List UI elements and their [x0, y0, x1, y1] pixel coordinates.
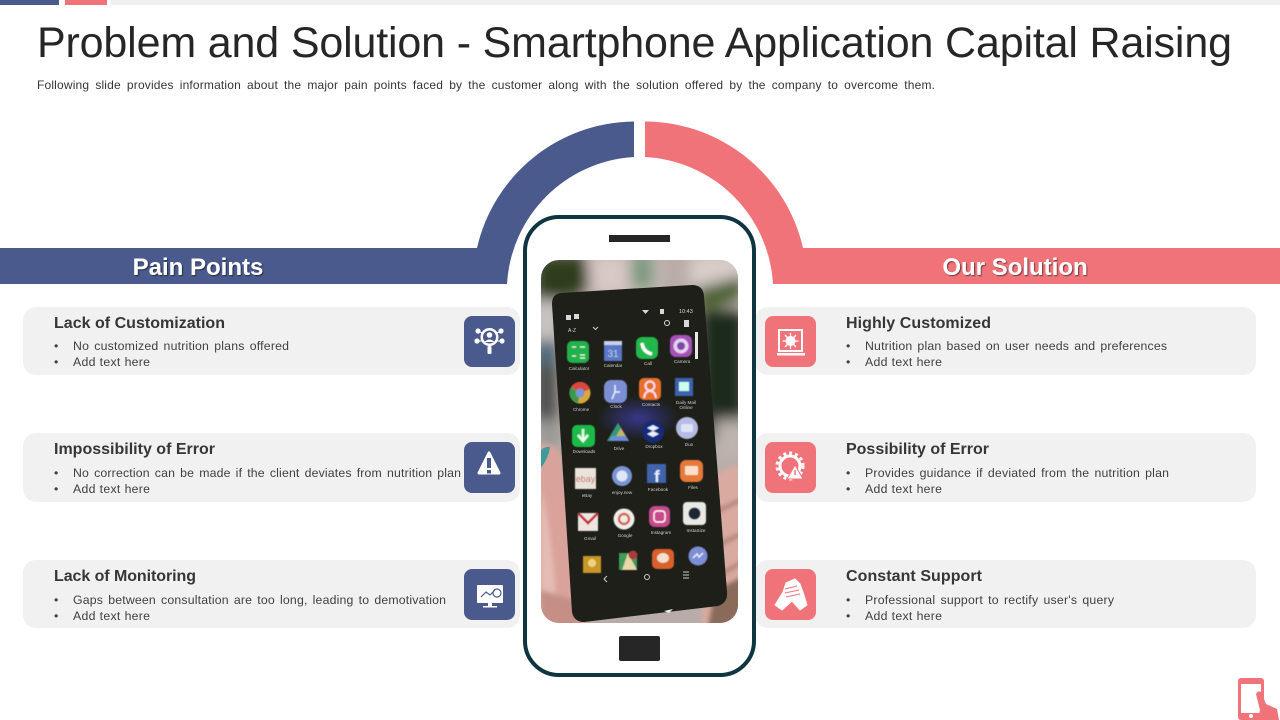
panel: lack of customization [23, 307, 520, 375]
panel: impossibility of error [23, 433, 520, 502]
app labels: Drive [614, 446, 625, 451]
app icons: f [654, 467, 660, 486]
bullet list [54, 593, 446, 623]
bullet list: • [54, 609, 58, 623]
app labels [569, 359, 706, 541]
app labels: Facebook [648, 487, 669, 492]
heading: Highly Customized [846, 315, 991, 332]
app labels: Calculator [569, 366, 590, 371]
bullet list: Add text here [865, 482, 942, 496]
app icons [567, 335, 708, 573]
bullet list: • [54, 466, 58, 480]
status bar and nav bar [566, 309, 698, 613]
phone home button [619, 636, 660, 661]
bullet list: • [846, 355, 850, 369]
fingernail [541, 447, 550, 468]
app labels: eBay [582, 493, 593, 498]
phone photo [541, 260, 738, 623]
app labels: enjoy.new [612, 490, 633, 495]
bullet list: • [54, 482, 58, 496]
icon: monitoring [464, 569, 515, 620]
heading: Lack of Customization [54, 315, 225, 332]
bullet list [846, 593, 1115, 623]
bullet list: • [846, 339, 850, 353]
icon: warning [464, 442, 515, 493]
heading: pain points: Pain Points [133, 254, 263, 281]
bullet list: Add text here [865, 355, 942, 369]
app labels: Clock [610, 404, 622, 409]
bullet list: Nutrition plan based on user needs and preferences [865, 339, 1167, 353]
bullet list: No customized nutrition plans offered [73, 339, 289, 353]
smartphone body [552, 285, 727, 622]
bullet list: Add text here [865, 609, 942, 623]
app icons: ebay [576, 474, 596, 484]
icon: customization [464, 316, 515, 367]
bullet list: Add text here [73, 355, 150, 369]
bullet list: • [846, 609, 850, 623]
panel: possibility of error [755, 433, 1256, 502]
bullet list: Add text here [73, 482, 150, 496]
bullet list [54, 466, 461, 496]
bullet list: • [54, 339, 58, 353]
app labels: Gmail [584, 536, 596, 541]
app labels: Instagram [651, 530, 671, 535]
heading: Impossibility of Error [54, 441, 215, 458]
bullet list: • [846, 482, 850, 496]
status bar and nav bar: 10:43 [679, 309, 693, 315]
screen glow [599, 398, 677, 438]
app labels: Dropbox [645, 444, 663, 449]
subtitle: Following slide provides information about the major pain points faced by the customer along with the solution offered by the company to overcome them. [37, 78, 935, 92]
title: Problem and Solution - Smartphone Application Capital Raising [37, 19, 1232, 67]
banner: pain points [0, 122, 634, 284]
app labels: Duo [685, 442, 694, 447]
bullet list: • [54, 593, 58, 607]
app labels: Daily Mail [676, 400, 696, 405]
bullet list: • [846, 593, 850, 607]
app labels: Calendar [604, 363, 623, 368]
app labels: Online [679, 405, 693, 410]
phone frame [525, 217, 754, 675]
status bar and nav bar: A-Z [568, 328, 576, 334]
phone speaker [609, 235, 670, 242]
top accent bars [0, 0, 1280, 5]
heading: our solution: Our Solution [942, 254, 1088, 281]
bullet list: Provides guidance if deviated from the nutrition plan [865, 466, 1169, 480]
heading: Possibility of Error [846, 441, 989, 458]
icon: phone with pointing hand [1238, 678, 1279, 720]
icon: gear with warning [765, 442, 816, 493]
panel: constant support [755, 560, 1256, 628]
bullet list [54, 339, 289, 369]
icon: clasped hands [765, 569, 816, 620]
right hand [700, 465, 738, 623]
panel: highly customized [755, 307, 1256, 375]
app labels: Chrome [573, 407, 590, 412]
panel: lack of monitoring [23, 560, 520, 628]
app labels: Call [644, 361, 652, 366]
bullet list [846, 466, 1169, 496]
left hand [541, 441, 588, 623]
app icons: 31 [607, 349, 619, 360]
app labels: Google [618, 533, 633, 538]
app labels: InstaSize [687, 528, 706, 533]
bullet list [846, 339, 1167, 369]
heading: Constant Support [846, 568, 983, 585]
bullet list: Gaps between consultation are too long, leading to demotivation [73, 593, 446, 607]
bullet list: Professional support to rectify user's query [865, 593, 1115, 607]
bullet list: • [846, 466, 850, 480]
icon: laptop customization [765, 316, 816, 367]
app labels: Camera [674, 359, 691, 364]
bullet list: Add text here [73, 609, 150, 623]
app labels: Downloads [573, 449, 596, 454]
app labels: Files [688, 485, 699, 490]
app labels: Contacts [642, 402, 661, 407]
heading: Lack of Monitoring [54, 568, 196, 585]
bullet list: No correction can be made if the client deviates from nutrition plan [73, 466, 461, 480]
blurred background [541, 260, 738, 448]
banner: our solution [645, 122, 1280, 284]
bullet list: • [54, 355, 58, 369]
